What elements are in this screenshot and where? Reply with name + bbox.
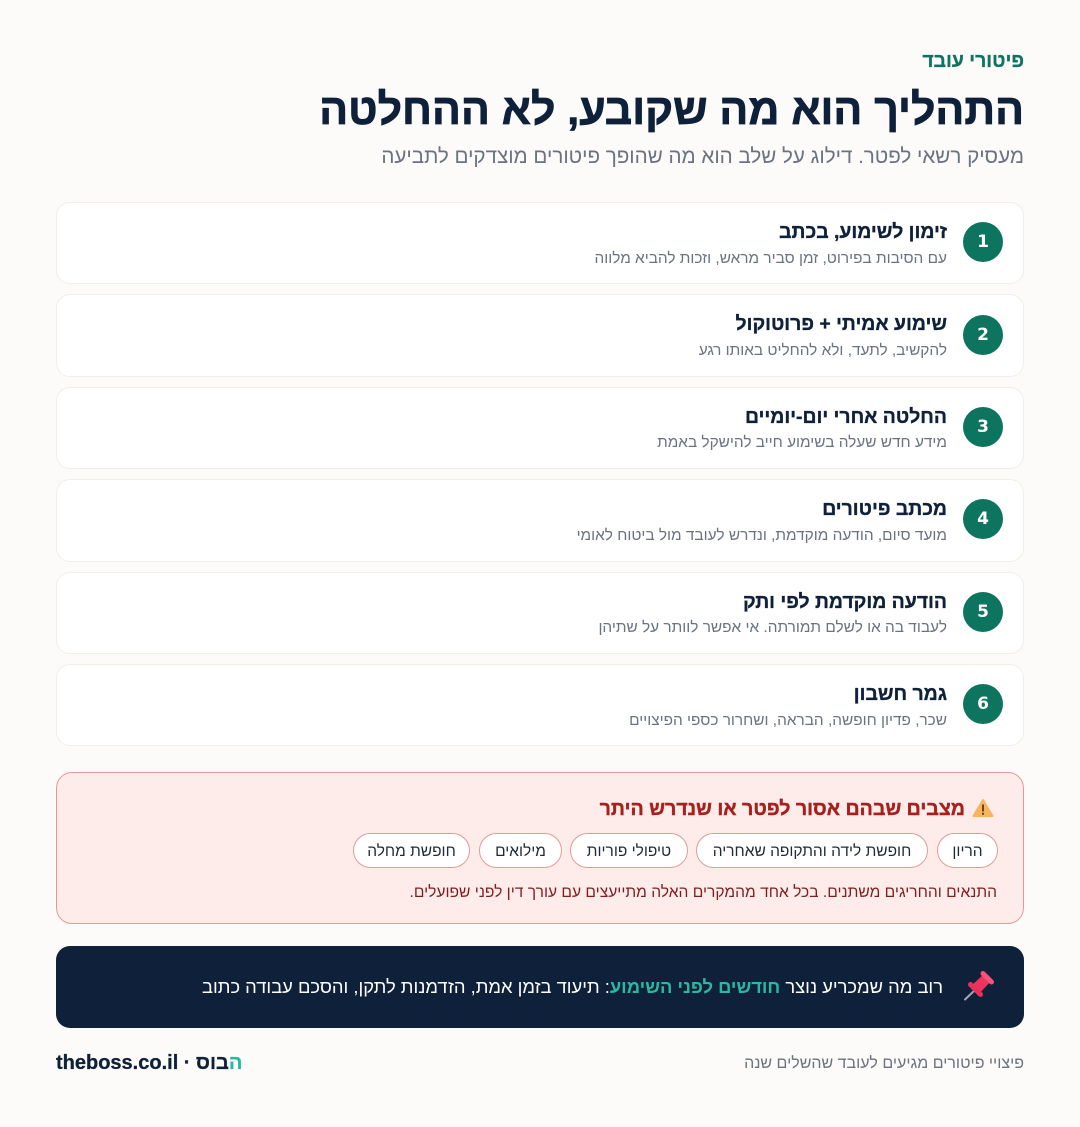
chip: fertility treatments xyxy=(570,833,688,868)
chip: pregnancy xyxy=(937,833,998,868)
eyebrow: פיטורי עובד xyxy=(922,50,1024,72)
subtitle: מעסיק רשאי לפטר. דילוג על שלב הוא מה שהופך פיטורים מוצדקים לתביעה xyxy=(381,145,1024,168)
step 6 description: שכר, פדיון חופשה, הבראה, ושחרור כספי הפיצויים xyxy=(629,712,947,728)
step card 5 xyxy=(56,572,1024,654)
step number 3 xyxy=(963,407,1003,447)
chip: fertility treatments: טיפולי פוריות xyxy=(587,843,671,860)
step number 1 xyxy=(963,222,1003,262)
step card 6 xyxy=(56,664,1024,746)
callout xyxy=(56,946,1024,1028)
step number 1: 1 xyxy=(977,232,989,252)
step number 4 xyxy=(963,499,1003,539)
footer note: פיצויי פיטורים מגיעים לעובד שהשלים שנה xyxy=(744,1055,1024,1072)
step card 2 xyxy=(56,294,1024,377)
step card 1 xyxy=(56,202,1024,284)
step 4 description: מועד סיום, הודעה מוקדמת, ונדרש לעובד מול ביטוח לאומי xyxy=(577,527,947,544)
step 2 title: שימוע אמיתי + פרוטוקול xyxy=(736,313,947,335)
chip: maternity leave xyxy=(696,833,928,868)
chip: reserve duty xyxy=(479,833,562,868)
step card 4 xyxy=(56,479,1024,562)
icon: pushpin xyxy=(964,971,994,1000)
step number 5 xyxy=(963,592,1003,632)
step 3 title: החלטה אחרי יום-יומיים xyxy=(745,406,947,428)
chip: maternity leave: חופשת לידה והתקופה שאחריה xyxy=(713,843,911,860)
title: התהליך הוא מה שקובע, לא ההחלטה xyxy=(319,86,1024,134)
step number 2: 2 xyxy=(977,325,989,345)
chip: sick leave: חופשת מחלה xyxy=(367,843,456,860)
step 5 title: הודעה מוקדמת לפי ותק xyxy=(743,591,947,613)
step number 4: 4 xyxy=(977,509,989,529)
step number 3: 3 xyxy=(977,417,989,437)
step number 6 xyxy=(963,684,1003,724)
step 2 description: להקשיב, לתעד, ולא להחליט באותו רגע xyxy=(699,342,947,359)
warning note: התנאים והחריגים משתנים. בכל אחד מהמקרים האלה מתייעצים עם עורך דין לפני שפועלים. xyxy=(410,884,997,901)
footer brand: theboss.co.il · הבוס xyxy=(56,1052,242,1074)
step 4 title: מכתב פיטורים xyxy=(822,498,947,520)
icon: warning xyxy=(972,799,994,817)
step 1 title: זימון לשימוע, בכתב xyxy=(779,221,947,243)
callout text: רוב מה שמכריע נוצר חודשים לפני השימוע: תיעוד בזמן אמת, הזדמנות לתקן, והסכם עבודה כתוב xyxy=(202,976,943,997)
chip: pregnancy: הריון xyxy=(952,843,983,860)
warning panel xyxy=(56,772,1024,924)
step number 5: 5 xyxy=(977,602,989,622)
step 1 description: עם הסיבות בפירוט, זמן סביר מראש, וזכות להביא מלווה xyxy=(594,250,947,266)
step 6 title: גמר חשבון xyxy=(854,683,947,705)
step number 2 xyxy=(963,315,1003,355)
warning heading: מצבים שבהם אסור לפטר או שנדרש היתר xyxy=(600,798,965,820)
step card 3 xyxy=(56,387,1024,469)
step 5 description: לעבוד בה או לשלם תמורתה. אי אפשר לוותר על שתיהן xyxy=(598,619,947,636)
step number 6: 6 xyxy=(977,694,989,714)
chip: sick leave xyxy=(353,833,470,868)
chip: reserve duty: מילואים xyxy=(495,843,546,860)
step 3 description: מידע חדש שעלה בשימוע חייב להישקל באמת xyxy=(657,434,947,451)
